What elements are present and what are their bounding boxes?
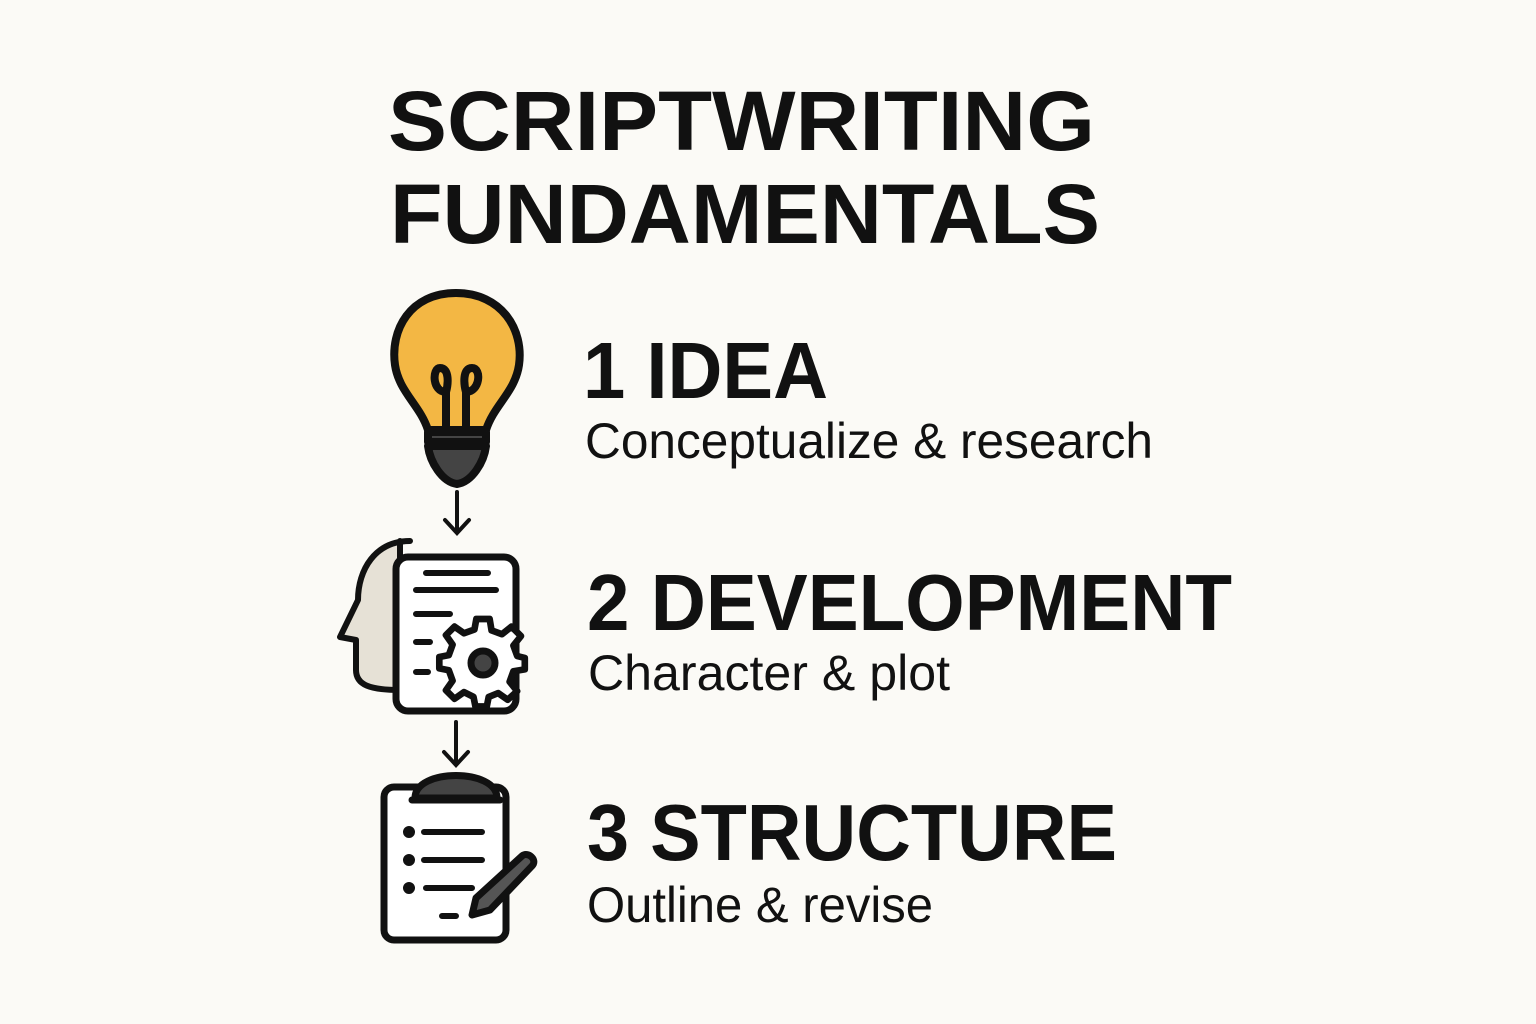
title: SCRIPTWRITING xyxy=(388,74,1095,168)
arrow: development to structure xyxy=(444,722,468,765)
icon: clipboard with pencil xyxy=(384,776,534,940)
step 3 text: 3 STRUCTURE xyxy=(587,788,1117,877)
step 1 text: 1 IDEA xyxy=(583,326,828,415)
icon: light bulb xyxy=(394,293,520,484)
step 1 text: Conceptualize & research xyxy=(585,413,1153,469)
icon: head with document and gear xyxy=(340,541,525,711)
step 1 text xyxy=(583,326,1153,469)
step 3 text: Outline & revise xyxy=(587,877,933,933)
step 2 text xyxy=(587,558,1232,701)
step 2 text: 2 DEVELOPMENT xyxy=(587,558,1232,647)
step 2 text: Character & plot xyxy=(588,645,950,701)
arrow: idea to development xyxy=(445,492,469,533)
step 3 text xyxy=(587,788,1117,933)
title: FUNDAMENTALS xyxy=(390,167,1100,261)
title xyxy=(388,74,1100,261)
